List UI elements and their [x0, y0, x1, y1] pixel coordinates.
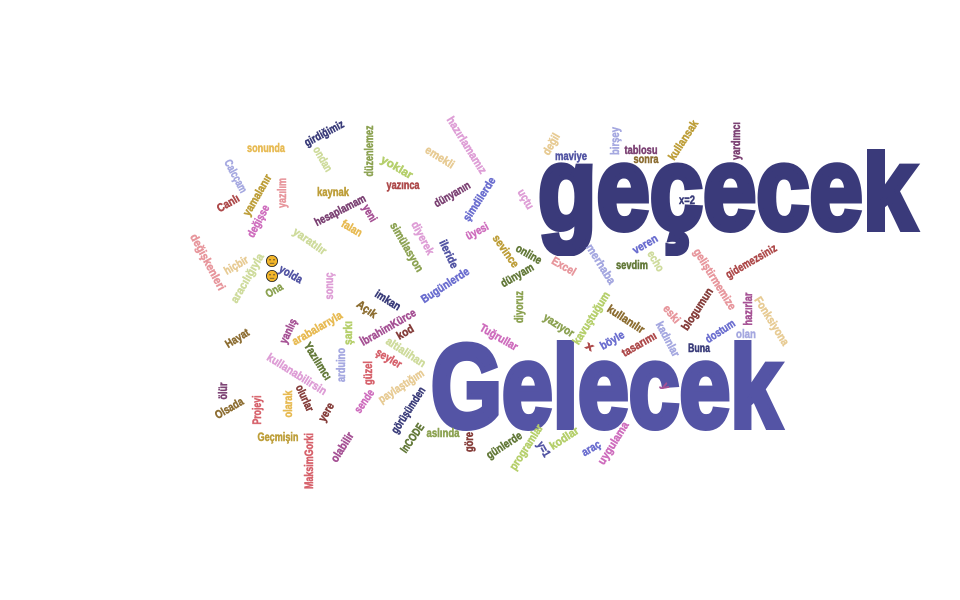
word: olan: olan — [736, 329, 756, 341]
word: programlar: programlar — [508, 422, 546, 473]
word: yardımcı: yardımcı — [731, 122, 743, 160]
word: dünyam: dünyam — [499, 262, 536, 290]
word: arabalarıyla: arabalarıyla — [290, 309, 345, 348]
word: echo: echo — [644, 249, 666, 274]
word: şeyler: şeyler — [373, 347, 404, 371]
word: şimdilerde: şimdilerde — [461, 175, 498, 224]
word: kavuştuğum: kavuştuğum — [571, 290, 613, 347]
word: x: x — [583, 340, 597, 354]
word: yanlış: yanlış — [278, 317, 300, 346]
word: simülasyon: simülasyon — [387, 221, 425, 274]
word: hiçbir: hiçbir — [222, 254, 251, 278]
word: olurlar: olurlar — [293, 383, 316, 414]
word: değişkenleri: değişkenleri — [187, 232, 227, 293]
word: uçtu: uçtu — [515, 187, 536, 212]
word: dostum: dostum — [703, 318, 738, 346]
word: sevdim: sevdim — [616, 260, 648, 272]
word: sonra: sonra — [634, 154, 659, 166]
word: sevince: sevince — [490, 233, 521, 270]
word: görüşümden: görüşümden — [389, 385, 428, 436]
word: yazınca: yazınca — [386, 180, 420, 192]
word: kaynak: kaynak — [317, 187, 349, 199]
word: yazılım: yazılım — [277, 178, 289, 208]
word: Hayat: Hayat — [223, 327, 252, 351]
word: Geçmişin: Geçmişin — [258, 432, 298, 444]
word: yeni: yeni — [359, 203, 379, 224]
word: y=1: y=1 — [534, 440, 553, 460]
word: yamalanır: yamalanır — [241, 172, 275, 218]
word: merhaba: merhaba — [583, 242, 617, 287]
word: İbrahimKürce: İbrahimKürce — [358, 306, 418, 349]
word: ölür: ölür — [218, 382, 230, 400]
word: paylaştığım: paylaştığım — [376, 368, 427, 406]
word: InCODE: InCODE — [398, 421, 427, 456]
word: emekli: emekli — [423, 144, 456, 171]
word: kullanabilirsin: kullanabilirsin — [264, 352, 328, 398]
word: aracılığıyla: aracılığıyla — [229, 251, 267, 305]
word: eski: eski — [660, 303, 682, 326]
word: kodlar: kodlar — [548, 425, 582, 453]
word: hazırlamamız: hazırlamamız — [444, 115, 489, 176]
word: kod: kod — [395, 323, 416, 343]
word: MaksimGorki: MaksimGorki — [304, 433, 316, 489]
word: Buna: Buna — [688, 343, 710, 355]
word: online: online — [513, 243, 544, 267]
word: arduino: arduino — [336, 348, 348, 382]
word: dünyanın: dünyanın — [432, 180, 473, 210]
word: olabilir: olabilir — [329, 430, 357, 465]
word: Ona: Ona — [264, 281, 286, 301]
word: günlerde: günlerde — [485, 430, 525, 462]
word: Bugünlerde: Bugünlerde — [419, 266, 472, 306]
word: tablosu: tablosu — [624, 145, 658, 157]
word: ileride: ileride — [436, 238, 460, 271]
word: Projeyi: Projeyi — [252, 396, 264, 424]
word: falan: falan — [339, 218, 364, 240]
word: sende: sende — [352, 387, 377, 416]
word: değil: değil — [541, 132, 563, 157]
word: imkan: imkan — [372, 288, 403, 313]
word: güzel: güzel — [363, 361, 375, 385]
word: uygulama: uygulama — [596, 420, 632, 467]
word: veren: veren — [631, 233, 660, 257]
word: Calcçam: Calcçam — [221, 158, 249, 195]
word: birşey: birşey — [610, 127, 622, 155]
word: girdiğimiz: girdiğimiz — [303, 118, 346, 149]
word: hazırlar: hazırlar — [743, 292, 755, 326]
icon: smiley top — [266, 255, 278, 267]
word: diyerek: diyerek — [408, 220, 436, 258]
word: değişse: değişse — [245, 203, 272, 240]
word: y: y — [658, 381, 672, 393]
word: Excel: Excel — [549, 255, 578, 279]
word: Olsada: Olsada — [213, 396, 246, 422]
word: araç: araç — [580, 438, 604, 459]
word cloud — [190, 116, 920, 489]
big word: Gelecek: Gelecek — [431, 321, 781, 453]
word: tasarımı: tasarımı — [620, 330, 659, 360]
word: maviye: maviye — [555, 151, 587, 163]
word: Açık: Açık — [354, 299, 379, 321]
word: gidemezsiniz: gidemezsiniz — [724, 242, 779, 281]
word: yere: yere — [317, 401, 337, 424]
icon: smiley bottom — [266, 270, 278, 282]
word: Canlı: Canlı — [215, 193, 242, 215]
word: yaratılır: yaratılır — [290, 226, 329, 258]
word: sonunda: sonunda — [247, 143, 285, 155]
word: diyoruz: diyoruz — [514, 291, 526, 323]
word: olarak: olarak — [283, 390, 295, 418]
word: böyle: böyle — [598, 329, 627, 353]
word: yolda: yolda — [277, 263, 305, 287]
word: üyesi: üyesi — [464, 221, 491, 243]
word: altialihan: altialihan — [383, 336, 428, 370]
word: x=2: x=2 — [679, 195, 695, 207]
word: yoklar: yoklar — [378, 154, 415, 182]
word: Yazılımcı: Yazılımcı — [301, 341, 333, 383]
word: hesaplamam: hesaplamam — [313, 193, 368, 229]
word: kullanılır: kullanılır — [605, 303, 647, 337]
word: Fonksiyona: Fonksiyona — [751, 295, 791, 348]
word: kadınlar: kadınlar — [653, 320, 682, 359]
word: düzenlemez: düzenlemez — [364, 125, 376, 176]
word: kullansak: kullansak — [667, 118, 701, 163]
word: ondan: ondan — [310, 145, 334, 174]
word: sonuç: sonuç — [324, 272, 336, 300]
word: şarkı: şarkı — [343, 321, 355, 345]
word: aslında: aslında — [426, 428, 460, 440]
word: Tuğrullar: Tuğrullar — [477, 322, 520, 354]
word: yazıyor: yazıyor — [541, 312, 576, 340]
word: geliştirmemize: geliştirmemize — [691, 247, 738, 312]
word: blogumun: blogumun — [680, 286, 716, 333]
word: göre: göre — [464, 432, 476, 452]
